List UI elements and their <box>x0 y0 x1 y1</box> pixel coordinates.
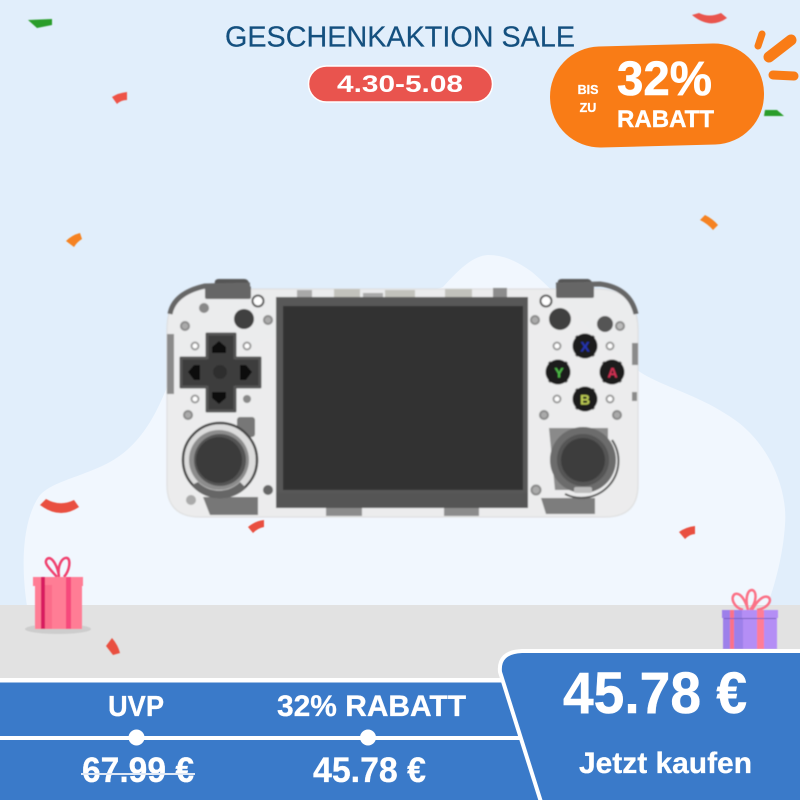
discount label: 32% RABATT <box>277 690 466 723</box>
floor band <box>0 605 800 685</box>
rabatt label: RABATT <box>617 106 714 133</box>
discounted price: 45.78 € <box>313 751 426 790</box>
title: GESCHENKAKTION SALE <box>225 22 575 54</box>
final price: 45.78 € <box>563 661 747 726</box>
action buttons: Y <box>554 364 564 380</box>
discount badge <box>549 34 794 149</box>
action buttons: B <box>580 392 590 408</box>
date pill: 4.30-5.08 <box>337 71 463 98</box>
burst rays <box>758 34 794 76</box>
confetti pieces <box>28 13 784 655</box>
top edge details <box>297 288 507 297</box>
background cloud shape <box>24 255 785 606</box>
shoulder buttons <box>213 279 593 293</box>
bis zu label: ZU <box>580 101 596 115</box>
screen <box>276 297 528 508</box>
right stick <box>541 427 618 514</box>
percent: 32% <box>617 53 712 106</box>
timeline with dots <box>0 730 522 746</box>
bis zu label: BIS <box>578 83 598 97</box>
uvp label: UVP <box>108 691 164 723</box>
bar background <box>0 680 560 800</box>
panel shape <box>500 651 800 800</box>
purple gift box <box>722 590 778 649</box>
price bar <box>0 678 560 800</box>
pink gift box <box>25 558 91 634</box>
console body <box>167 289 638 517</box>
date pill <box>308 66 492 102</box>
right small buttons <box>531 296 624 494</box>
action buttons: X <box>580 338 590 354</box>
badge shape <box>549 42 765 149</box>
left stick <box>183 417 258 515</box>
bottom edge tabs <box>326 508 479 516</box>
shoulder outlines <box>170 284 636 314</box>
original price: 67.99 € <box>82 751 194 790</box>
buy panel <box>500 651 800 800</box>
d-pad <box>181 334 260 411</box>
handheld game console <box>167 279 638 517</box>
action buttons: A <box>607 364 618 380</box>
left small buttons <box>181 296 273 505</box>
action buttons <box>546 334 624 412</box>
call to action: Jetzt kaufen <box>579 747 752 780</box>
